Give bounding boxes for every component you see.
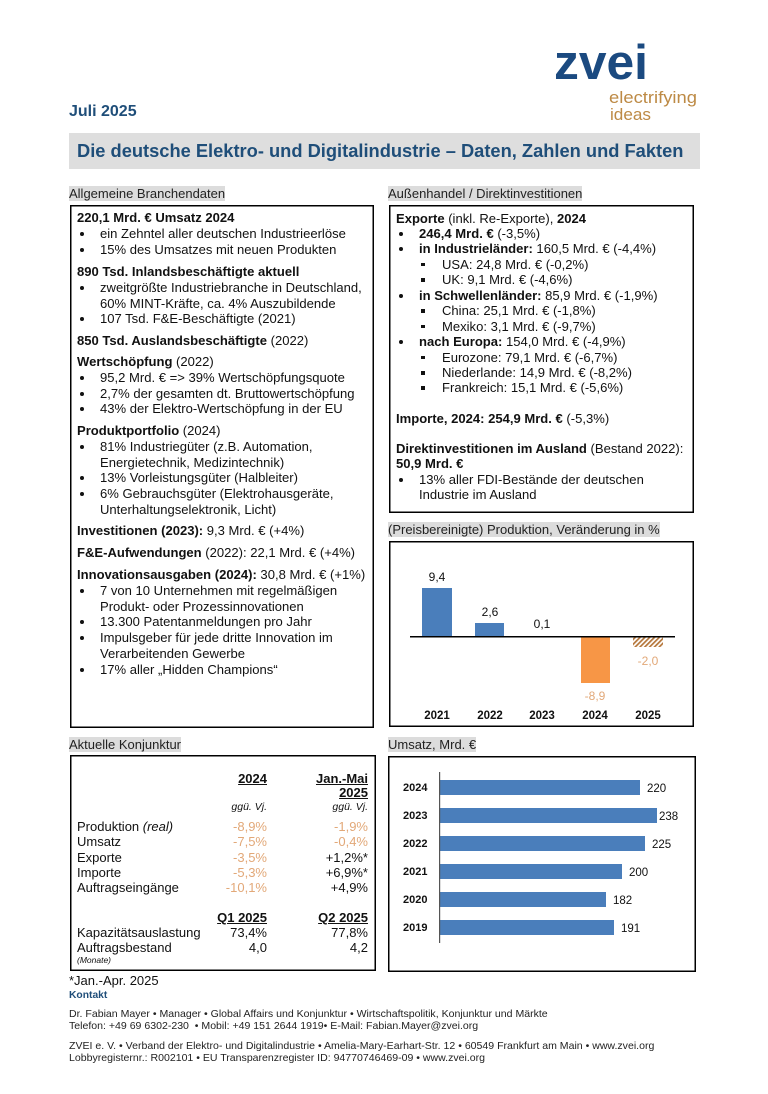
text block: Direktinvestitionen: Industrie im Ausland: [419, 487, 536, 502]
table rows: quarters: 4,2: [350, 940, 368, 955]
text block: Umsatz: 220,1 Mrd. € Umsatz 2024: [77, 210, 234, 225]
text block: Exporte: Niederlande: 14,9 Mrd. € (-8,2%): [442, 365, 632, 380]
text block: Investitionen: Investitionen (2023): 9,3 Mrd. € (+4%): [77, 523, 304, 538]
table rows: indicators: Importe: [77, 865, 121, 880]
text block: Innovationsausgaben: 17% aller „Hidden Champions“: [100, 662, 278, 677]
logo: zvei electrifying ideas: ideas: [610, 105, 651, 124]
table rows: indicators: Exporte: [77, 850, 122, 865]
bar chart: Produktion: 2023: [529, 710, 555, 722]
text block: Umsatz: [77, 210, 346, 257]
table rows: indicators: -8,9%: [233, 819, 267, 834]
text block: Exporte: Exporte (inkl. Re-Exporte), 2024: [396, 210, 586, 226]
title band: [69, 133, 700, 169]
text block: Exporte: [396, 210, 658, 395]
table rows: indicators: -10,1%: [226, 880, 267, 895]
text block: Wertschöpfung: [77, 354, 355, 416]
bar chart: Umsatz: 2023: [403, 810, 427, 822]
title: Die deutsche Elektro- und Digitalindustrie – Daten, Zahlen und Fakten: [77, 140, 683, 161]
bar chart: Umsatz: 200: [629, 867, 648, 879]
text block: Exporte: nach Europa: 154,0 Mrd. € (-4,9%): [419, 334, 626, 349]
text block: contact person: [69, 1008, 548, 1032]
bar chart: Produktion: 9,4: [429, 570, 446, 584]
bar chart: Produktion: 0,1: [534, 617, 551, 631]
date: Juli 2025: [69, 103, 137, 120]
text block: Produktportfolio: 13% Vorleistungsgüter (Halbleiter): [100, 470, 298, 485]
table rows: quarters: (Monate): [77, 955, 111, 965]
table header: 2024: [238, 771, 267, 786]
table rows: indicators: +4,9%: [331, 880, 368, 895]
table rows: quarters: Q2 2025: [318, 910, 368, 925]
panel: Umsatz chart: [388, 756, 696, 972]
text block: Wertschöpfung: 95,2 Mrd. € => 39% Wertschöpfungsquote: [100, 370, 345, 385]
logo: zvei electrifying ideas: electrifying: [609, 88, 697, 107]
table rows: indicators: -1,9%: [334, 819, 368, 834]
text block: Exporte: 246,4 Mrd. € (-3,5%): [419, 226, 540, 241]
text block: Produktportfolio: Unterhaltungselektronik, Licht): [100, 502, 276, 517]
bar chart: Produktion: 2021: [424, 710, 450, 722]
text block: Direktinvestitionen: 13% aller FDI-Bestände der deutschen: [419, 472, 644, 487]
text block: Umsatz: 15% des Umsatzes mit neuen Produkten: [100, 242, 336, 257]
text block: Innovationsausgaben: 13.300 Patentanmeldungen pro Jahr: [100, 614, 312, 629]
text block: Produktportfolio: 6% Gebrauchsgüter (Elektrohausgeräte,: [100, 486, 334, 501]
table rows: indicators: Umsatz: [77, 834, 121, 849]
table header: 2025: [339, 785, 368, 800]
text block: Auslandsbeschäftigte: 850 Tsd. Auslandsbeschäftigte (2022): [77, 333, 308, 348]
bar chart: Umsatz: 2024: [403, 782, 428, 794]
bar chart: Umsatz: 225: [652, 839, 671, 851]
table rows: quarters: Kapazitätsauslastung: [77, 925, 201, 940]
table rows: indicators: -7,5%: [233, 834, 267, 849]
bar chart: Umsatz: 182: [613, 895, 632, 907]
logo: zvei electrifying ideas: [554, 36, 697, 124]
text block: Exporte: Eurozone: 79,1 Mrd. € (-6,7%): [442, 350, 618, 365]
text block: organisation: Lobbyregisternr.: R002101 • EU Transparenzregister ID: 94770746469-09 • www.zvei.org: [69, 1052, 485, 1064]
text block: Exporte: UK: 9,1 Mrd. € (-4,6%): [442, 272, 573, 287]
table rows: indicators: +1,2%*: [326, 850, 368, 865]
table rows: quarters: 73,4%: [230, 925, 267, 940]
text block: Exporte: China: 25,1 Mrd. € (-1,8%): [442, 303, 596, 318]
table rows: indicators: -3,5%: [233, 850, 267, 865]
table rows: quarters: [77, 910, 368, 965]
text block: Inlandsbeschäftigte: 107 Tsd. F&E-Beschäftigte (2021): [100, 311, 296, 326]
footnote: *Jan.-Apr. 2025: [69, 973, 159, 988]
bar chart: Umsatz: 2020: [403, 894, 427, 906]
text block: Exporte: Frankreich: 15,1 Mrd. € (-5,6%): [442, 380, 623, 395]
text block: Produktportfolio: 81% Industriegüter (z.B. Automation,: [100, 439, 312, 454]
table rows: quarters: 77,8%: [331, 925, 368, 940]
text block: Exporte: in Schwellenländer: 85,9 Mrd. € (-1,9%): [419, 288, 658, 303]
text block: Innovationsausgaben: 7 von 10 Unternehmen mit regelmäßigen: [100, 583, 337, 598]
heading: Kontakt: Kontakt: [69, 990, 107, 1001]
heading: Aktuelle Konjunktur: Aktuelle Konjunktur: [69, 737, 181, 752]
text block: Produktportfolio: Produktportfolio (2024): [77, 423, 221, 438]
bar chart: Produktion: 2024: [582, 710, 608, 722]
text block: Exporte: USA: 24,8 Mrd. € (-0,2%): [442, 257, 588, 272]
table rows: indicators: Produktion (real): [77, 819, 173, 834]
text block: Wertschöpfung: 2,7% der gesamten dt. Bruttowertschöpfung: [100, 386, 355, 401]
table rows: quarters: Q1 2025: [217, 910, 267, 925]
bar chart: Produktion: [410, 570, 675, 722]
text block: Inlandsbeschäftigte: 890 Tsd. Inlandsbeschäftigte aktuell: [77, 264, 299, 279]
bar chart: Umsatz: 2022: [403, 838, 427, 850]
heading: Umsatz: Umsatz, Mrd. €: [388, 737, 476, 752]
text block: Exporte: Mexiko: 3,1 Mrd. € (-9,7%): [442, 319, 596, 334]
panel: Produktion chart: [389, 541, 694, 727]
table rows: quarters: 4,0: [249, 940, 267, 955]
text block: Umsatz: ein Zehntel aller deutschen Industrieerlöse: [100, 226, 346, 241]
text block: Importe: Importe, 2024: 254,9 Mrd. € (-5,3%): [396, 411, 609, 426]
text block: Innovationsausgaben: [77, 567, 365, 677]
bar chart: Umsatz: 2021: [403, 866, 427, 878]
panel: Außenhandel / Direktinvestitionen: [389, 205, 694, 513]
text block: Wertschöpfung: 43% der Elektro-Wertschöpfung in der EU: [100, 401, 343, 416]
text block: Direktinvestitionen: 50,9 Mrd. €: [396, 456, 463, 471]
table rows: indicators: Auftragseingänge: [77, 880, 179, 895]
bar chart: Umsatz: 220: [647, 783, 666, 795]
text block: contact person: Telefon: +49 69 6302-230 • Mobil: +49 151 2644 1919• E-Mail: Fabian.Mayer@zvei.org: [69, 1020, 478, 1032]
text block: Inlandsbeschäftigte: [77, 264, 362, 326]
table rows: quarters: Auftragsbestand: [77, 940, 172, 955]
table rows: indicators: [77, 819, 368, 895]
text block: Innovationsausgaben: Produkt- oder Prozessinnovationen: [100, 599, 304, 614]
table rows: indicators: -5,3%: [233, 865, 267, 880]
text block: Produktportfolio: Energietechnik, Medizintechnik): [100, 455, 284, 470]
panel: Aktuelle Konjunktur table: [70, 755, 376, 971]
table header: Jan.-Mai: [316, 771, 368, 786]
bar chart: Umsatz: 238: [659, 811, 678, 823]
text block: F&E-Aufwendungen: F&E-Aufwendungen (2022): 22,1 Mrd. € (+4%): [77, 545, 355, 560]
table header: [231, 771, 368, 813]
text block: Innovationsausgaben: Impulsgeber für jede dritte Innovation im: [100, 630, 333, 645]
table header: ggü. Vj.: [332, 801, 368, 813]
text block: Innovationsausgaben: Verarbeitenden Gewerbe: [100, 646, 245, 661]
heading: Allgemeine Branchendaten: Allgemeine Branchendaten: [69, 186, 225, 201]
text block: Inlandsbeschäftigte: 60% MINT-Kräfte, ca. 4% Auszubildende: [100, 296, 336, 311]
bar chart: Umsatz: 191: [621, 923, 640, 935]
bar chart: Umsatz: 2019: [403, 922, 427, 934]
table header: ggü. Vj.: [231, 801, 267, 813]
text block: Produktportfolio: [77, 423, 334, 517]
text block: organisation: [69, 1040, 654, 1064]
heading: Produktion: (Preisbereinigte) Produktion, Veränderung in %: [388, 522, 660, 537]
bar chart: Produktion: 2022: [477, 710, 503, 722]
text block: contact person: Dr. Fabian Mayer • Manager • Global Affairs und Konjunktur • Wirtschaftspolitik, Konjunktur und Märkte: [69, 1008, 548, 1020]
table rows: indicators: -0,4%: [334, 834, 368, 849]
bar chart: Produktion: 2025: [635, 710, 661, 722]
heading: Außenhandel: Außenhandel / Direktinvestitionen: [388, 186, 582, 201]
text block: Inlandsbeschäftigte: zweitgrößte Industriebranche in Deutschland,: [100, 280, 362, 295]
text block: Direktinvestitionen: [396, 441, 683, 502]
panel: Allgemeine Branchendaten: [70, 205, 374, 728]
bar chart: Produktion: -8,9: [585, 689, 606, 703]
text block: Direktinvestitionen: Direktinvestitionen im Ausland (Bestand 2022):: [396, 441, 683, 456]
bar chart: Produktion: 2,6: [482, 605, 499, 619]
text block: Exporte: in Industrieländer: 160,5 Mrd. € (-4,4%): [419, 241, 656, 256]
logo: zvei electrifying ideas: zvei: [554, 36, 648, 90]
table rows: indicators: +6,9%*: [326, 865, 368, 880]
text block: Wertschöpfung: Wertschöpfung (2022): [77, 354, 214, 369]
text block: organisation: ZVEI e. V. • Verband der Elektro- und Digitalindustrie • Amelia-Mary-Earhart-Str. 12 • 60549 Frankfurt am Main • www.zvei.org: [69, 1040, 654, 1052]
bar chart: Produktion: -2,0: [638, 654, 659, 668]
bar chart: Umsatz: [403, 772, 678, 943]
text block: Innovationsausgaben: Innovationsausgaben (2024): 30,8 Mrd. € (+1%): [77, 567, 365, 582]
